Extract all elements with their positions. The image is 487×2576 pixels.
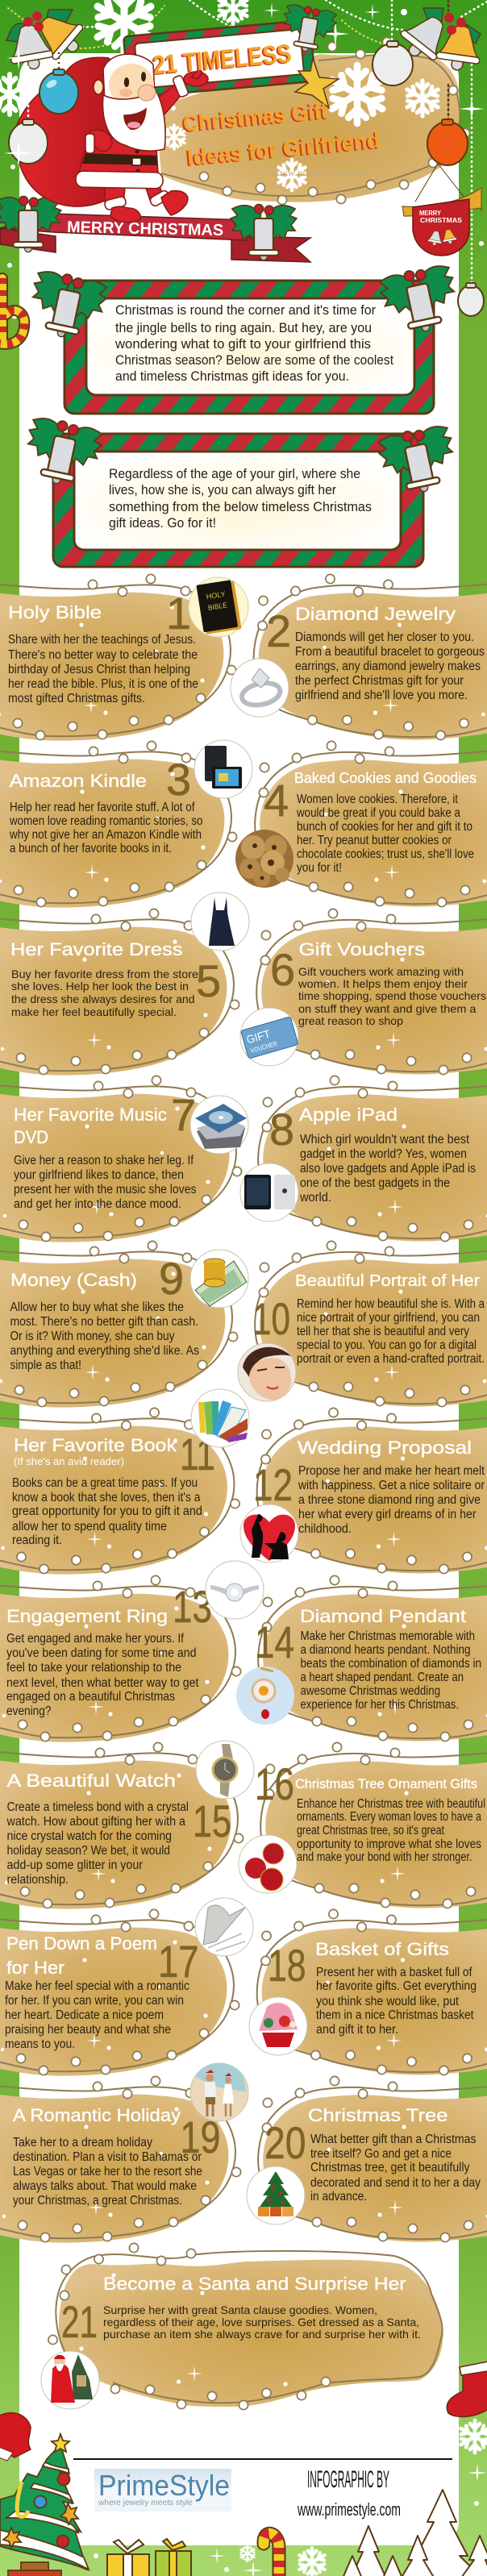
striped frame xyxy=(65,281,434,414)
heading: Beautiful Portrait of Her xyxy=(295,1272,480,1290)
number: 16 xyxy=(255,1758,294,1809)
intro text: Christmas is round the corner and it's time for xyxy=(115,303,376,318)
panel 19: a romantic holiday xyxy=(0,2063,248,2243)
icon: beach couple xyxy=(190,2063,248,2121)
main title: christmas gift: Christmas Gift xyxy=(182,98,329,136)
description: evening? xyxy=(6,1704,52,1718)
description: a bunch of her favorite books in it. xyxy=(10,842,172,855)
heading: Engagement Ring xyxy=(6,1606,168,1626)
description: awesome Christmas wedding xyxy=(300,1684,440,1698)
description xyxy=(13,2136,202,2208)
description: Help her read her favorite stuff. A lot of xyxy=(10,801,195,814)
icon: portrait xyxy=(238,1343,296,1401)
description: Create a timeless bond with a crystal xyxy=(6,1800,189,1814)
heading xyxy=(6,1933,157,1978)
intro text: wondering what to gift to your girlfriend this xyxy=(114,337,371,352)
icon: christmas tree xyxy=(247,2166,305,2224)
description xyxy=(310,2133,481,2204)
panel 14: diamond pendant xyxy=(236,1575,487,1742)
icon: gift basket xyxy=(249,1997,307,2055)
heading: A Beautiful Watch xyxy=(6,1771,176,1791)
number: 11 xyxy=(180,1429,215,1479)
striped frame xyxy=(53,434,423,567)
panel 16: christmas tree ornament gifts xyxy=(239,1742,487,1908)
description: birthday of Jesus Christ than helping xyxy=(8,663,190,676)
description: her read the bible. Plus, it is one of the xyxy=(8,677,198,691)
icon: ipad xyxy=(240,1163,298,1221)
intro text xyxy=(109,467,372,531)
intro text: gift ideas. Go for it! xyxy=(109,516,216,531)
heading: Gift Vouchers xyxy=(298,939,425,959)
description xyxy=(295,630,485,702)
description: There's no better way to celebrate the xyxy=(8,648,198,662)
subheading: (If she's an avid reader) xyxy=(14,1455,124,1467)
number: 20 xyxy=(264,2117,306,2168)
panel 5: her favorite dress xyxy=(0,893,249,1076)
heading: Holy Bible xyxy=(8,602,102,622)
heading: A Romantic Holiday xyxy=(13,2105,181,2125)
heading: Diamond Jewelry xyxy=(295,604,456,624)
description: feel to take your relationship to the xyxy=(6,1661,181,1675)
banner blob xyxy=(156,53,460,202)
description: women. It helps them enjoy their xyxy=(298,977,468,990)
description: Take her to a dream holiday xyxy=(13,2136,152,2149)
left ornaments xyxy=(4,46,78,168)
bell left xyxy=(24,268,110,344)
icon: watch xyxy=(196,1741,254,1799)
intro text: Regardless of the age of your girl, where she xyxy=(109,467,360,481)
description: allow her to spend quality time xyxy=(12,1520,167,1534)
description: destination. Plan a visit to Bahamas or xyxy=(13,2150,202,2164)
description: childhood. xyxy=(298,1522,352,1536)
bell left xyxy=(19,414,105,491)
number: 1 xyxy=(166,588,191,639)
description: Surprise her with great Santa clause goodies. Women, xyxy=(103,2303,377,2316)
number: 15 xyxy=(193,1796,231,1846)
santa with sack xyxy=(15,54,208,223)
description: you've been dating for some time and xyxy=(6,1646,197,1660)
description: Women love cookies. Therefore, it xyxy=(297,793,459,806)
description: always talks about. That would make xyxy=(13,2179,197,2193)
intro panel 1 xyxy=(24,262,463,414)
intro text: something from the below timeless Christmas xyxy=(109,500,372,514)
panel 15: a beautiful watch xyxy=(0,1741,254,1909)
description: purchase an item she always crave for and surprise her with it. xyxy=(103,2328,421,2341)
description: praising her beauty and what she xyxy=(5,2023,171,2037)
number: 18 xyxy=(268,1940,306,1991)
description: Get engaged and make her yours. If xyxy=(6,1632,185,1646)
mitten xyxy=(0,2413,31,2457)
dotted garlands xyxy=(8,0,487,290)
description xyxy=(300,1629,481,1712)
description: present her with the music she loves xyxy=(14,1183,197,1196)
panel 2: diamond jewelry xyxy=(231,574,487,740)
description: Gift vouchers work amazing with xyxy=(298,965,464,978)
panel 6: gift vouchers xyxy=(240,909,487,1075)
icon: cd stack xyxy=(190,1096,248,1154)
panel bulbs xyxy=(48,2243,331,2410)
description: Books can be a great time pass. If you xyxy=(12,1476,198,1490)
description: the perfect Christmas gift for your xyxy=(295,674,464,688)
heading: DVD xyxy=(14,1127,48,1147)
number: 3 xyxy=(166,754,191,805)
description: regardless of their age, love surprises. Get dressed as a Santa, xyxy=(103,2316,419,2328)
icon: gift voucher xyxy=(240,1008,298,1066)
sign board xyxy=(123,20,315,98)
bell right xyxy=(377,262,463,339)
description: great Christmas tree, so it's great xyxy=(297,1824,445,1837)
heading: Her Favorite Music xyxy=(14,1105,167,1125)
panel 7: her favorite music dvd xyxy=(0,1076,248,1242)
footer decorations xyxy=(0,2361,487,2576)
icon: bible: HOLY xyxy=(206,590,226,601)
description: nice crystal watch for the coming xyxy=(6,1829,172,1843)
icon: gift voucher: VOUCHER xyxy=(250,1040,278,1055)
description xyxy=(10,1300,199,1372)
description: Las Vegas or take her to the resort she xyxy=(13,2165,202,2179)
description: your Christmas, a great Christmas. xyxy=(13,2194,182,2208)
heading: Her Favorite Dress xyxy=(10,939,183,959)
heading: Apple iPad xyxy=(299,1105,398,1125)
description: time shopping, spend those vouchers xyxy=(298,989,486,1002)
heading: Amazon Kindle xyxy=(10,771,147,791)
icon: bible: BIBLE xyxy=(207,601,227,612)
description: you for it! xyxy=(297,861,342,875)
ribbon bells xyxy=(0,196,297,260)
panel 18: basket of gifts xyxy=(249,1909,487,2075)
description: Share with her the teachings of Jesus. xyxy=(8,633,196,647)
infographic credit: www.primestyle.com xyxy=(297,2499,401,2520)
gift boxes xyxy=(107,2539,191,2576)
heading: Pen Down a Poem xyxy=(6,1933,157,1954)
stocking cuff xyxy=(460,2361,487,2375)
heading xyxy=(14,1105,167,1147)
description: her heart. Dedicate a nice poem xyxy=(5,2008,164,2022)
heading: Christmas Tree xyxy=(308,2105,448,2125)
description: experience for her this Christmas. xyxy=(300,1698,459,1712)
number: 7 xyxy=(171,1089,196,1140)
description: holiday season? We bet, it would xyxy=(6,1844,170,1858)
description: would be great if you could bake a xyxy=(296,806,460,820)
candy cane left xyxy=(0,278,24,344)
icon: santa photo xyxy=(41,2351,99,2409)
icon: books xyxy=(191,1389,249,1447)
heading: Baked Cookies and Goodies xyxy=(294,770,477,786)
snowy trees xyxy=(342,2490,487,2576)
christmas tree xyxy=(0,2434,89,2576)
description: most. There's no better gift than cash. xyxy=(10,1315,198,1329)
header illustration xyxy=(0,0,487,344)
main title: 21 timeless: 21 TIMELESS xyxy=(152,39,293,80)
description xyxy=(296,793,474,875)
description: Christmas tree, get it beautifully xyxy=(310,2161,470,2174)
description: she loves. Help her look the best in xyxy=(11,980,189,993)
description: make her feel beautifully special. xyxy=(11,1005,177,1018)
description xyxy=(298,1464,485,1536)
description xyxy=(316,1966,477,2037)
panel 8: apple ipad xyxy=(240,1076,487,1242)
icon: bible xyxy=(189,577,248,637)
description xyxy=(5,1979,189,2051)
description: in advance. xyxy=(310,2190,367,2204)
description xyxy=(6,1632,199,1718)
description: Give her a reason to shake her leg. If xyxy=(14,1154,194,1167)
heading: Diamond Pendant xyxy=(300,1606,466,1626)
description: Diamonds will get her closer to you. xyxy=(295,630,474,644)
description xyxy=(103,2303,421,2341)
panel 1: holy bible xyxy=(0,574,248,741)
mitten cuff xyxy=(0,2446,13,2461)
icon: cookies xyxy=(235,830,293,888)
ribbon title: MERRY CHRISTMAS xyxy=(67,218,223,239)
heading: for Her xyxy=(6,1958,65,1978)
stocking xyxy=(447,2363,487,2417)
description: engaged on a beautiful Christmas xyxy=(6,1690,175,1704)
heading: Wedding Proposal xyxy=(298,1438,472,1458)
number: 19 xyxy=(181,2112,221,2162)
description: reading it. xyxy=(12,1534,62,1547)
description: one of the best gadgets in the xyxy=(300,1176,450,1190)
description: world. xyxy=(299,1191,331,1205)
description xyxy=(297,1297,485,1366)
description xyxy=(297,1797,485,1864)
panel 21: become a santa xyxy=(41,2243,443,2410)
description: and gift it to her. xyxy=(316,2023,398,2037)
candy cane xyxy=(264,2533,279,2576)
description xyxy=(9,801,202,855)
intro text: and timeless Christmas gift ideas for you. xyxy=(115,369,349,384)
bells right xyxy=(394,6,484,73)
number: 14 xyxy=(255,1617,294,1667)
description: anything and everything she'd like. As xyxy=(10,1344,199,1358)
description xyxy=(11,968,198,1018)
number: 9 xyxy=(159,1253,184,1304)
primestyle logo: where jewelry meets style xyxy=(98,2498,193,2507)
infographic credit xyxy=(297,2466,401,2520)
description: Allow her to buy what she likes the xyxy=(10,1300,184,1314)
icon: kindle xyxy=(194,740,252,798)
description: Or is it? With money, she can buy xyxy=(10,1330,175,1343)
icon: engagement ring xyxy=(206,1561,264,1619)
panel 4: baked cookies xyxy=(235,741,487,907)
frame inner xyxy=(74,452,401,550)
description xyxy=(298,965,486,1027)
number: 8 xyxy=(269,1104,294,1155)
description: for her. If you can write, you can win xyxy=(5,1994,184,2008)
intro text: Christmas season? Below are some of the coolest xyxy=(115,353,393,368)
panel 10: portrait xyxy=(238,1241,487,1407)
right ornaments xyxy=(373,41,484,316)
sign bell holly xyxy=(279,2,339,56)
icon: gift voucher: GIFT xyxy=(245,1027,272,1047)
description: simple as that! xyxy=(10,1359,81,1372)
description: add-up some glitter in your xyxy=(6,1858,143,1872)
intro text xyxy=(114,303,393,384)
description: Present her with a basket full of xyxy=(316,1966,472,1979)
snowflakes xyxy=(94,2420,487,2576)
description: on stuff they want and give them a xyxy=(298,1002,477,1015)
description: next level, then what better way to get xyxy=(6,1676,199,1690)
icon: proposal heart xyxy=(240,1504,298,1563)
description: and get her into the dance mood. xyxy=(14,1197,181,1211)
description: gadget in the world? Yes, women xyxy=(300,1147,467,1161)
description: her. Try peanut butter cookies or xyxy=(297,834,452,847)
heading: Christmas Tree Ornament Gifts xyxy=(295,1776,477,1792)
trumpet pennant: CHRISTMAS xyxy=(420,216,462,224)
number: 4 xyxy=(264,775,289,826)
description: women love reading romantic stories, so xyxy=(9,814,203,828)
number: 13 xyxy=(173,1581,212,1632)
trumpet pennant: MERRY xyxy=(419,209,441,217)
garland wire xyxy=(161,55,460,196)
icon: ornaments xyxy=(239,1835,297,1893)
number: 12 xyxy=(253,1459,293,1510)
panel wire xyxy=(56,2251,443,2403)
icon: money xyxy=(190,1250,248,1308)
main title: ideas for girlfriend: Ideas for Girlfriend xyxy=(186,127,381,170)
watermark: © www.primestyle.com xyxy=(261,167,364,178)
footer divider xyxy=(73,2458,452,2460)
description: the dress she always desires for and xyxy=(11,993,195,1005)
description: you think she would like, put xyxy=(316,1995,460,2008)
intro text: lives, how she is, you can always gift her xyxy=(109,483,336,497)
ribbon xyxy=(0,214,310,262)
garland bulbs xyxy=(199,37,470,205)
description: most gifted Christmas gifts. xyxy=(8,692,145,705)
description xyxy=(299,1133,476,1205)
panel 17: pen down a poem xyxy=(0,1898,253,2076)
panel background xyxy=(59,2260,443,2407)
number: 5 xyxy=(196,955,221,1006)
intro panel 2 xyxy=(19,414,461,567)
description xyxy=(6,1800,189,1887)
number: 10 xyxy=(252,1293,290,1344)
number: 17 xyxy=(158,1936,198,1987)
heading: Money (Cash) xyxy=(10,1270,137,1290)
primestyle logo: PrimeStyle xyxy=(98,2469,230,2502)
description: relationship. xyxy=(6,1873,69,1887)
description xyxy=(8,633,198,705)
icon: diamond ring xyxy=(231,659,289,717)
snowflakes xyxy=(0,0,485,319)
description: watch. How about gifting her with a xyxy=(6,1815,185,1829)
icon: dress xyxy=(191,893,249,951)
number: 21 xyxy=(61,2296,98,2347)
heading: Become a Santa and Surprise Her xyxy=(103,2274,406,2294)
panel 9: money xyxy=(0,1241,248,1408)
icon: pendant xyxy=(236,1667,294,1725)
description: Which girl wouldn't want the best xyxy=(300,1133,470,1147)
panel 20: christmas tree xyxy=(247,2076,487,2242)
description: great reason to shop xyxy=(298,1014,403,1027)
intro text: the jingle bells to ring again. But hey, are you xyxy=(115,321,372,335)
panel 3: amazon kindle xyxy=(0,740,252,908)
description: means to you. xyxy=(5,2037,75,2051)
description: tree itself? Go and get a nice xyxy=(310,2147,452,2161)
panel 13: engagement ring xyxy=(0,1561,264,1742)
description: Make her feel special with a romantic xyxy=(5,1979,189,1993)
trumpet pennant xyxy=(402,164,481,256)
description: your girlfriend likes to dance, then xyxy=(14,1168,184,1182)
heading: Basket of Gifts xyxy=(315,1939,449,1959)
icon: pen hand xyxy=(195,1898,253,1956)
frame inner xyxy=(86,298,414,395)
description: girlfriend and she'll love you more. xyxy=(295,689,468,702)
panel 11: her favorite book xyxy=(0,1389,249,1575)
heading: Her Favorite Book xyxy=(14,1435,177,1455)
description: why not give her an Amazon Kindle with xyxy=(9,828,202,842)
bells left xyxy=(6,5,91,73)
description: Buy her favorite dress from the store xyxy=(11,968,198,980)
description: great opportunity for you to gift it and xyxy=(12,1504,202,1518)
description xyxy=(14,1154,197,1211)
number: 2 xyxy=(266,606,291,656)
star xyxy=(295,58,339,108)
bell right xyxy=(376,422,461,499)
description: know a book that she loves, then it's a xyxy=(12,1491,201,1504)
panel 12: wedding proposal xyxy=(240,1408,487,1574)
description xyxy=(12,1476,202,1547)
number: 6 xyxy=(270,944,295,995)
